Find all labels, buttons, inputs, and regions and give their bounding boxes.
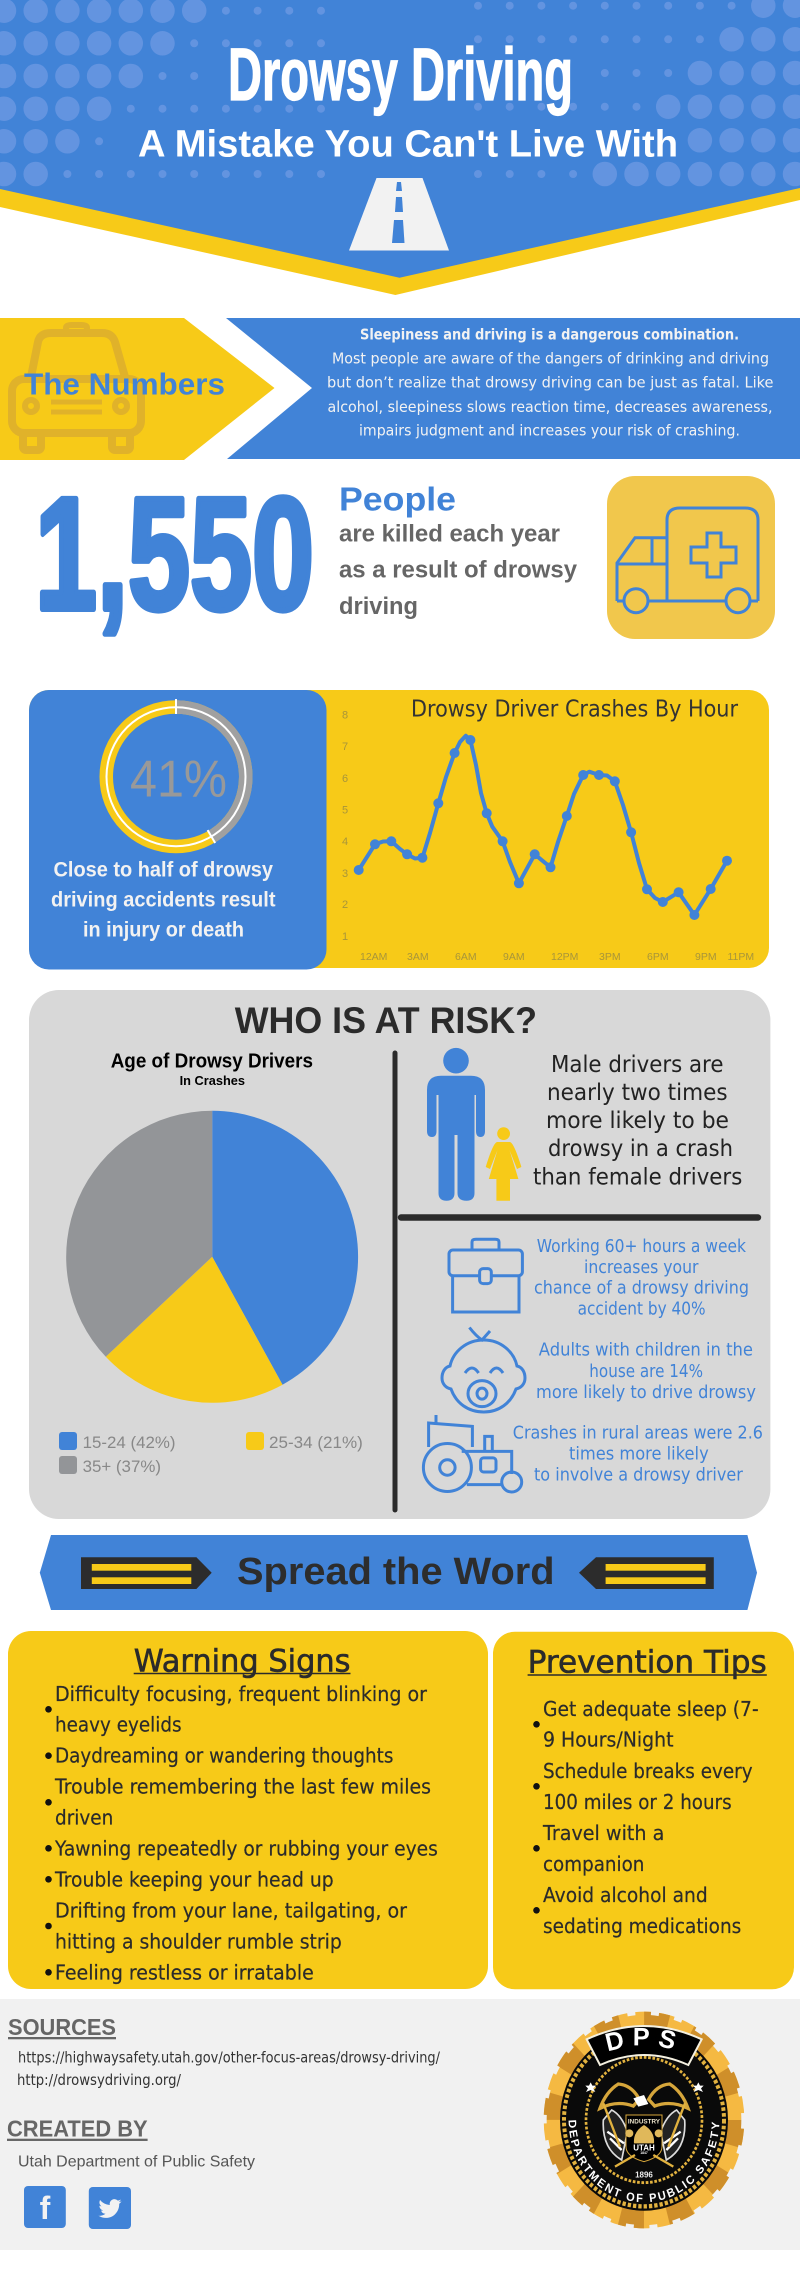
warning list: Difficulty focusing, frequent blinking or bbox=[55, 1682, 428, 1706]
pie title: Age of Drowsy Drivers bbox=[111, 1050, 313, 1072]
header yellow chevron bbox=[0, 185, 800, 295]
warning list: Trouble keeping your head up bbox=[54, 1868, 334, 1892]
icon: briefcase bbox=[449, 1239, 522, 1312]
children text bbox=[536, 1341, 756, 1403]
prevention list: Get adequate sleep (7- bbox=[543, 1697, 759, 1721]
prevention list bbox=[542, 1697, 759, 1938]
card background bbox=[8, 1631, 488, 1989]
right arrow bbox=[579, 1557, 714, 1589]
caption: Close to half of drowsy bbox=[54, 859, 273, 882]
created by heading: CREATED BY bbox=[7, 2116, 148, 2142]
icon: DPS badge: DPS bbox=[605, 2028, 676, 2051]
y axis labels: 4 bbox=[342, 836, 348, 848]
icon: DPS badge: INDUSTRY bbox=[628, 2119, 661, 2126]
prevention list: sedating medications bbox=[543, 1914, 741, 1938]
prevention list: 100 miles or 2 hours bbox=[543, 1790, 732, 1814]
legend: 15-24 (42%) bbox=[83, 1433, 176, 1452]
line chart: crashes by hour bbox=[342, 697, 754, 963]
y axis labels: 3 bbox=[342, 868, 348, 880]
prevention list: Avoid alcohol and bbox=[543, 1883, 708, 1907]
source links bbox=[17, 2049, 441, 2089]
work hours text: Working 60+ hours a week bbox=[537, 1237, 747, 1257]
stat description: as a result of drowsy bbox=[339, 557, 578, 584]
intro paragraph: Most people are aware of the dangers of drinking and driving bbox=[332, 349, 769, 367]
icon: DPS badge: 1896 bbox=[635, 2170, 653, 2179]
x axis labels bbox=[360, 951, 754, 963]
warning list: Yawning repeatedly or rubbing your eyes bbox=[54, 1837, 438, 1861]
x axis labels: 9PM bbox=[695, 951, 717, 963]
work hours text bbox=[534, 1237, 749, 1319]
data points bbox=[354, 735, 732, 920]
x axis labels: 12AM bbox=[360, 951, 387, 963]
x axis labels: 9AM bbox=[503, 951, 525, 963]
prevention bullets bbox=[533, 1721, 540, 1914]
donut chart: 41%: 41% bbox=[130, 751, 227, 809]
panel: crash stats bbox=[29, 690, 769, 970]
icon: DPS badge: DEPARTMENT OF PUBLIC SAFETY bbox=[568, 2120, 720, 2202]
y axis labels: 8 bbox=[342, 709, 348, 721]
children text: more likely to drive drowsy bbox=[536, 1383, 756, 1403]
icon: DPS badge: 1847 bbox=[640, 2151, 648, 2155]
header blue chevron bbox=[0, 0, 800, 278]
pie subtitle: In Crashes bbox=[180, 1074, 245, 1088]
caption: in injury or death bbox=[83, 919, 244, 942]
intro paragraph: Sleepiness and driving is a dangerous combination. bbox=[360, 325, 739, 343]
yellow arrow bbox=[0, 318, 274, 460]
warning list: Daydreaming or wandering thoughts bbox=[55, 1744, 393, 1768]
male vs female text bbox=[533, 1052, 742, 1190]
icon: DPS badge: UTAH bbox=[614, 2035, 674, 2057]
panel: the numbers banner bbox=[0, 318, 800, 460]
panel: warning signs bbox=[8, 1631, 488, 1989]
title: Drowsy Driving bbox=[228, 33, 573, 116]
panel: who is at risk bbox=[29, 990, 770, 1519]
stat description bbox=[339, 521, 578, 620]
icon: ambulance tile bbox=[607, 476, 775, 639]
caption bbox=[51, 859, 276, 942]
subtitle: A Mistake You Can't Live With bbox=[138, 124, 678, 166]
icon: man and woman bbox=[427, 1048, 521, 1201]
y axis labels: 7 bbox=[342, 741, 348, 753]
icon: facebook: f bbox=[40, 2190, 51, 2226]
big number: 1,550 bbox=[35, 464, 314, 643]
y axis labels: 5 bbox=[342, 804, 348, 816]
work hours text: accident by 40% bbox=[578, 1299, 706, 1319]
left arrow bbox=[81, 1557, 212, 1589]
donut chart: 41% bbox=[106, 699, 246, 846]
x axis labels: 6AM bbox=[455, 951, 477, 963]
x axis labels: 11PM bbox=[728, 951, 754, 963]
icon: taxi watermark bbox=[12, 325, 141, 450]
heading: Prevention Tips bbox=[528, 1645, 767, 1681]
x axis labels: 3PM bbox=[599, 951, 621, 963]
intro paragraph: but don’t realize that drowsy driving can be just as fatal. Like bbox=[327, 374, 774, 392]
male vs female text: Male drivers are bbox=[551, 1052, 724, 1078]
warning bullets bbox=[45, 1706, 52, 1976]
y axis labels bbox=[342, 709, 348, 943]
source links: http://drowsydriving.org/ bbox=[17, 2071, 182, 2089]
icon: baby bbox=[442, 1328, 525, 1412]
panel: footer bbox=[0, 1999, 800, 2250]
heading: The Numbers: The Numbers bbox=[24, 366, 225, 401]
male vs female text: drowsy in a crash bbox=[548, 1136, 733, 1162]
vertical divider bbox=[392, 1053, 398, 1510]
panel: header banner bbox=[0, 0, 800, 295]
warning list: Trouble remembering the last few miles bbox=[54, 1775, 431, 1799]
male vs female text: nearly two times bbox=[547, 1080, 728, 1106]
icon: tractor bbox=[423, 1415, 522, 1492]
blue intro panel bbox=[226, 318, 800, 459]
halftone dot pattern bbox=[4, 6, 796, 174]
chart title: Drowsy Driver Crashes By Hour bbox=[411, 697, 738, 723]
prevention list: companion bbox=[543, 1852, 644, 1876]
creator: Utah Department of Public Safety bbox=[18, 2154, 255, 2171]
children text: Adults with children in the bbox=[539, 1341, 753, 1361]
y axis labels: 1 bbox=[342, 931, 348, 943]
stat label: People bbox=[339, 481, 456, 518]
banner shape bbox=[40, 1535, 757, 1610]
legend bbox=[59, 1432, 363, 1476]
warning list bbox=[54, 1682, 438, 1985]
rural text bbox=[513, 1424, 763, 1486]
intro paragraph: impairs judgment and increases your risk of crashing. bbox=[359, 422, 740, 440]
rural text: Crashes in rural areas were 2.6 bbox=[513, 1424, 763, 1444]
heading: WHO IS AT RISK? bbox=[235, 1000, 537, 1041]
heading: Spread the Word bbox=[237, 1551, 555, 1593]
icon: DPS badge: UTAH bbox=[633, 2143, 655, 2152]
source links: https://highwaysafety.utah.gov/other-focus-areas/drowsy-driving/ bbox=[18, 2049, 441, 2067]
children text: house are 14% bbox=[589, 1362, 703, 1382]
icon: road bbox=[349, 178, 449, 250]
sources heading: SOURCES bbox=[8, 2014, 116, 2040]
prevention list: Travel with a bbox=[542, 1821, 664, 1845]
blue stat panel bbox=[29, 690, 326, 970]
prevention list: 9 Hours/Night bbox=[543, 1728, 674, 1752]
work hours text: chance of a drowsy driving bbox=[534, 1279, 749, 1299]
icon: facebook bbox=[24, 2186, 66, 2228]
stat description: are killed each year bbox=[339, 521, 560, 548]
icon: DPS badge bbox=[544, 2012, 744, 2228]
heading underline bbox=[528, 1674, 767, 1676]
warning list: driven bbox=[55, 1806, 113, 1830]
panel: spread the word banner bbox=[40, 1535, 757, 1610]
footer background bbox=[0, 1999, 800, 2250]
rural text: times more likely bbox=[569, 1445, 709, 1465]
caption: driving accidents result bbox=[51, 889, 276, 912]
prevention list: Schedule breaks every bbox=[543, 1759, 753, 1783]
x axis labels: 6PM bbox=[647, 951, 669, 963]
card background bbox=[493, 1632, 794, 1989]
rural text: to involve a drowsy driver bbox=[534, 1466, 744, 1486]
warning list: Feeling restless or irratable bbox=[55, 1961, 314, 1985]
heading underline bbox=[134, 1672, 350, 1674]
stat description: driving bbox=[339, 593, 418, 620]
horizontal divider bbox=[401, 1214, 758, 1221]
warning list: heavy eyelids bbox=[55, 1713, 182, 1737]
data line bbox=[359, 736, 727, 915]
x axis labels: 3AM bbox=[407, 951, 429, 963]
x axis labels: 12PM bbox=[551, 951, 578, 963]
pie chart: age of drowsy drivers bbox=[59, 1050, 363, 1476]
icon: twitter bbox=[89, 2187, 131, 2229]
y axis labels: 6 bbox=[342, 773, 348, 785]
warning list: hitting a shoulder rumble strip bbox=[55, 1930, 342, 1954]
gray panel background bbox=[29, 990, 770, 1519]
male vs female text: than female drivers bbox=[533, 1164, 742, 1190]
intro paragraph bbox=[327, 325, 774, 440]
intro paragraph: alcohol, sleepiness slows reaction time, decreases awareness, bbox=[328, 398, 772, 416]
heading: Warning Signs bbox=[134, 1643, 350, 1679]
work hours text: increases your bbox=[584, 1258, 699, 1278]
stat: 1,550 people bbox=[35, 464, 775, 643]
legend: 25-34 (21%) bbox=[269, 1433, 363, 1452]
yellow chart background bbox=[29, 690, 769, 968]
pie slices bbox=[66, 1111, 358, 1403]
legend: 35+ (37%) bbox=[83, 1457, 161, 1476]
panel: prevention tips bbox=[493, 1632, 794, 1989]
warning list: Drifting from your lane, tailgating, or bbox=[55, 1899, 408, 1923]
male vs female text: more likely to be bbox=[546, 1108, 729, 1134]
y axis labels: 2 bbox=[342, 899, 348, 911]
